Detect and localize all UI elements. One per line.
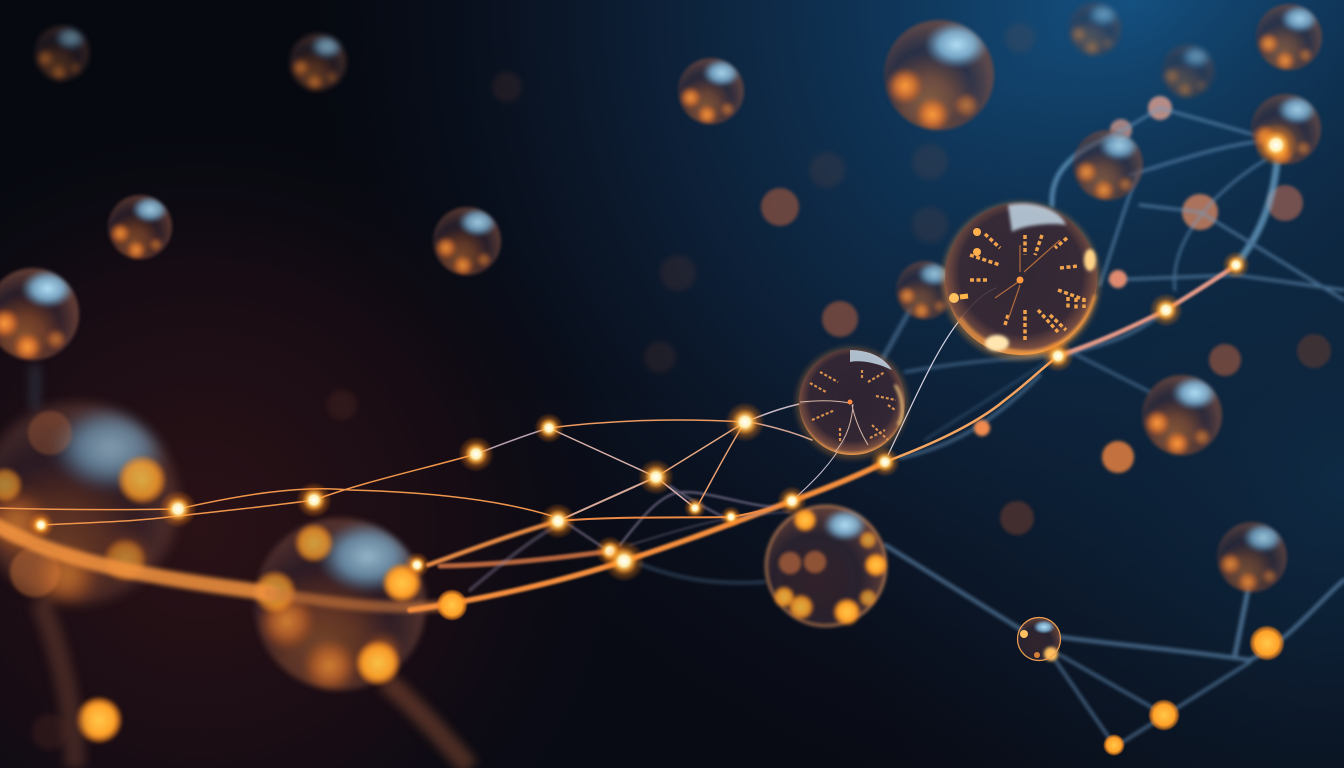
muted violet strands [470,486,790,590]
small glass sphere with data ticks [796,347,908,459]
blob highlights [0,411,422,686]
glowing network nodes [28,123,1298,756]
sphere top large [878,20,994,152]
sphere lower right [1214,522,1287,606]
sphere center left [430,207,501,289]
blurred sphere far left [0,403,178,643]
sphere top right 1 [1066,3,1121,65]
sphere right 5 [1070,130,1143,214]
vertical stems [35,365,470,768]
sphere top center [675,58,744,137]
sphere top left 2 [287,34,346,101]
main glass sphere with data ticks [942,202,1100,360]
sphere left edge [0,268,79,378]
blurred sphere lower center [245,518,426,724]
small sphere on lower right network [1017,617,1061,661]
faint bokeh dots [32,23,1035,750]
blue background network lines [640,108,1344,745]
sphere top right 2 [1159,45,1214,107]
sphere right middle [1138,375,1222,471]
sphere behind main [893,261,954,331]
thin glowing network lines [0,288,996,525]
thick orange strand [0,265,1236,610]
sphere top right 3 [1253,4,1322,83]
defocused background spheres [0,3,1322,606]
large sphere lower center right [765,505,888,627]
sphere right 4 [1248,94,1321,178]
orange bokeh dots [75,96,1331,744]
large blurred spheres at lower left [0,365,470,768]
sphere top left 1 [32,26,89,91]
sphere left [105,195,172,272]
